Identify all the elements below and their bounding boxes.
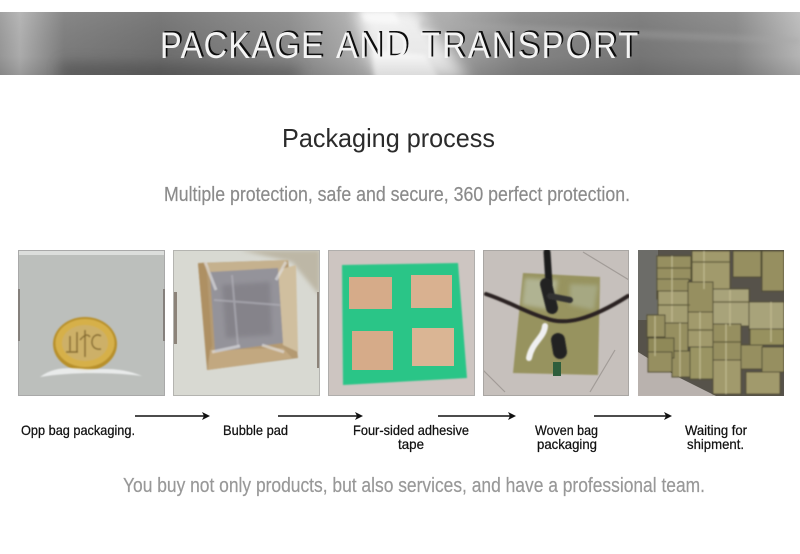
bag highlight	[40, 368, 142, 377]
label: opp bag packaging: Opp bag packaging.	[21, 422, 135, 438]
banner title: TRANSPORT	[420, 25, 638, 66]
photo: stacked parcels waiting for shipment	[638, 250, 784, 396]
banner title: AND	[338, 23, 410, 65]
arrow 2	[278, 415, 361, 417]
arrow 4	[594, 415, 670, 417]
tan panels	[349, 277, 392, 309]
label: four-sided adhesive tape	[353, 422, 469, 452]
label: waiting for shipment: Waiting for	[685, 422, 747, 438]
photo: bubble pad in carton	[173, 250, 320, 396]
label: waiting for shipment	[685, 422, 747, 452]
banner title: PACKAGE	[162, 23, 325, 65]
photo: woven bag with handlebar	[483, 250, 629, 396]
photo: coin in opp bag	[18, 250, 165, 396]
banner title: TRANSPORT	[422, 23, 640, 65]
label: four-sided adhesive tape: Four-sided adhesive	[353, 422, 469, 438]
label: woven bag packaging: packaging	[537, 436, 597, 452]
green tape	[342, 263, 467, 385]
closing statement: You buy not only products, but also services, and have a professional team.	[123, 475, 705, 497]
carton	[198, 260, 298, 370]
arrow 3	[438, 415, 514, 417]
label: woven bag packaging: Woven bag	[535, 422, 598, 438]
label: four-sided adhesive tape: tape	[398, 436, 424, 452]
heading: packaging process: Packaging process	[282, 123, 495, 153]
icon: gold coin	[53, 317, 117, 371]
subtitle: Multiple protection, safe and secure, 360 perfect protection.	[164, 184, 630, 206]
handlebar	[486, 252, 628, 358]
banner title	[160, 23, 640, 66]
banner: metallic header	[0, 12, 800, 75]
parcels	[647, 251, 784, 394]
photo: four-sided adhesive tape box	[328, 250, 475, 396]
banner title: AND	[336, 25, 408, 66]
banner title: PACKAGE	[160, 25, 323, 66]
label: woven bag packaging	[535, 422, 598, 452]
label: bubble pad: Bubble pad	[223, 422, 288, 438]
label: waiting for shipment: shipment.	[687, 436, 744, 452]
woven bag	[513, 273, 600, 375]
arrow 1	[135, 415, 208, 417]
